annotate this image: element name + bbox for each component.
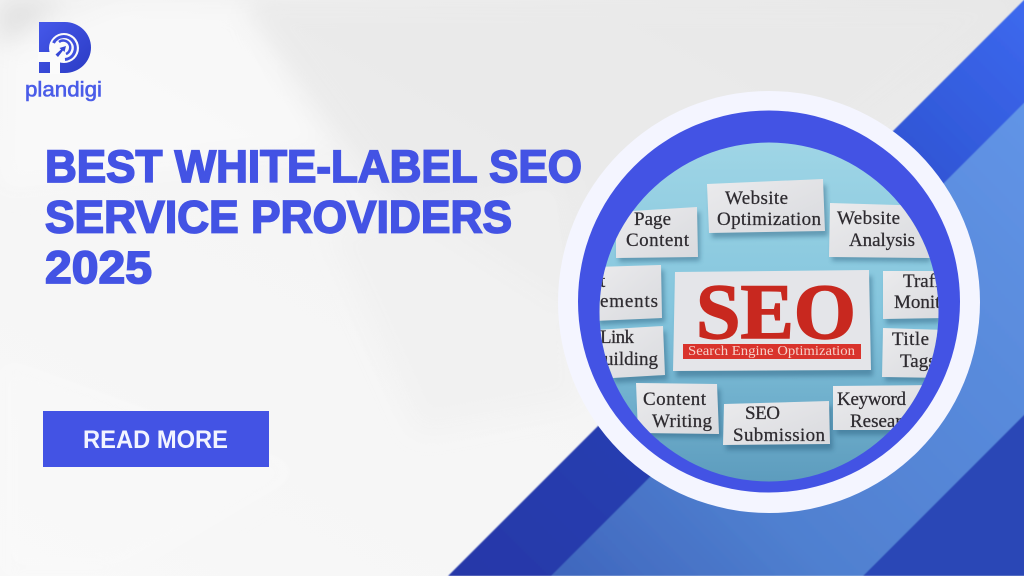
clipping: website analysis: Website — [837, 208, 900, 229]
clipping: SEO submission — [723, 401, 830, 446]
SEO headline: SEO — [696, 268, 856, 355]
clipping: SEO submission: SEO — [745, 403, 780, 424]
clipping: improvements (cropped) — [595, 265, 662, 321]
clipping: link building (cropped): uilding — [604, 349, 658, 370]
clipping: website optimization: Optimization — [717, 209, 822, 230]
circular photo frame — [558, 91, 981, 513]
outer pale ring — [558, 91, 980, 513]
clipping: keyword research (cropped): Research — [850, 411, 920, 432]
clipping: improvements (cropped): ements — [600, 291, 658, 312]
clipping: title tags (cropped): Title — [892, 329, 929, 350]
clipping: link building (cropped): Link — [600, 327, 634, 348]
title line 1: BEST WHITE-LABEL SEO — [45, 141, 582, 192]
clipping: website analysis — [829, 203, 930, 258]
clipping: improvements (cropped): t — [600, 271, 606, 292]
clipping: content writing: Writing — [652, 411, 712, 432]
clipping: page content: Page — [634, 209, 671, 230]
logo wordmark: plandigi — [25, 78, 102, 102]
icon: D mark with target and arrow — [38, 22, 91, 74]
clipping: website optimization — [707, 179, 825, 233]
clipping: traffic monitoring (cropped) — [883, 271, 938, 319]
blue ring — [578, 110, 960, 492]
clipping: website analysis: Analysis — [849, 230, 915, 251]
photo: SEO paper clippings — [600, 142, 938, 482]
logo: plandigi — [25, 22, 102, 102]
read more button: READ MORE — [83, 426, 228, 454]
clipping: title tags (cropped) — [882, 328, 938, 378]
clipping: page content: Content — [626, 230, 690, 251]
clipping: keyword research (cropped) — [833, 385, 922, 430]
clipping: main SEO card — [673, 268, 871, 371]
title line 3: 2025 — [45, 242, 152, 293]
clipping: title tags (cropped): Tags — [900, 351, 936, 372]
clipping: website optimization: Website — [725, 188, 788, 209]
clipping: main SEO card: Search Engine Optimization — [688, 344, 855, 359]
clipping: traffic monitoring (cropped): Monitoring — [894, 292, 981, 313]
clipping: content writing — [636, 383, 719, 434]
title line 2: SERVICE PROVIDERS — [45, 192, 512, 242]
diagonal blue bands — [448, 0, 1024, 576]
clipping: SEO submission: Submission — [733, 425, 826, 446]
clipping: link building (cropped) — [595, 326, 665, 378]
clipping: content writing: Content — [643, 389, 707, 410]
clipping: page content — [616, 207, 698, 258]
read more button — [43, 411, 269, 467]
clipping: traffic monitoring (cropped): Traffic — [903, 271, 955, 292]
red subtitle bar — [683, 344, 861, 359]
title — [45, 141, 582, 293]
clipping: keyword research (cropped): Keyword — [837, 389, 906, 410]
paper shadows — [599, 185, 940, 450]
